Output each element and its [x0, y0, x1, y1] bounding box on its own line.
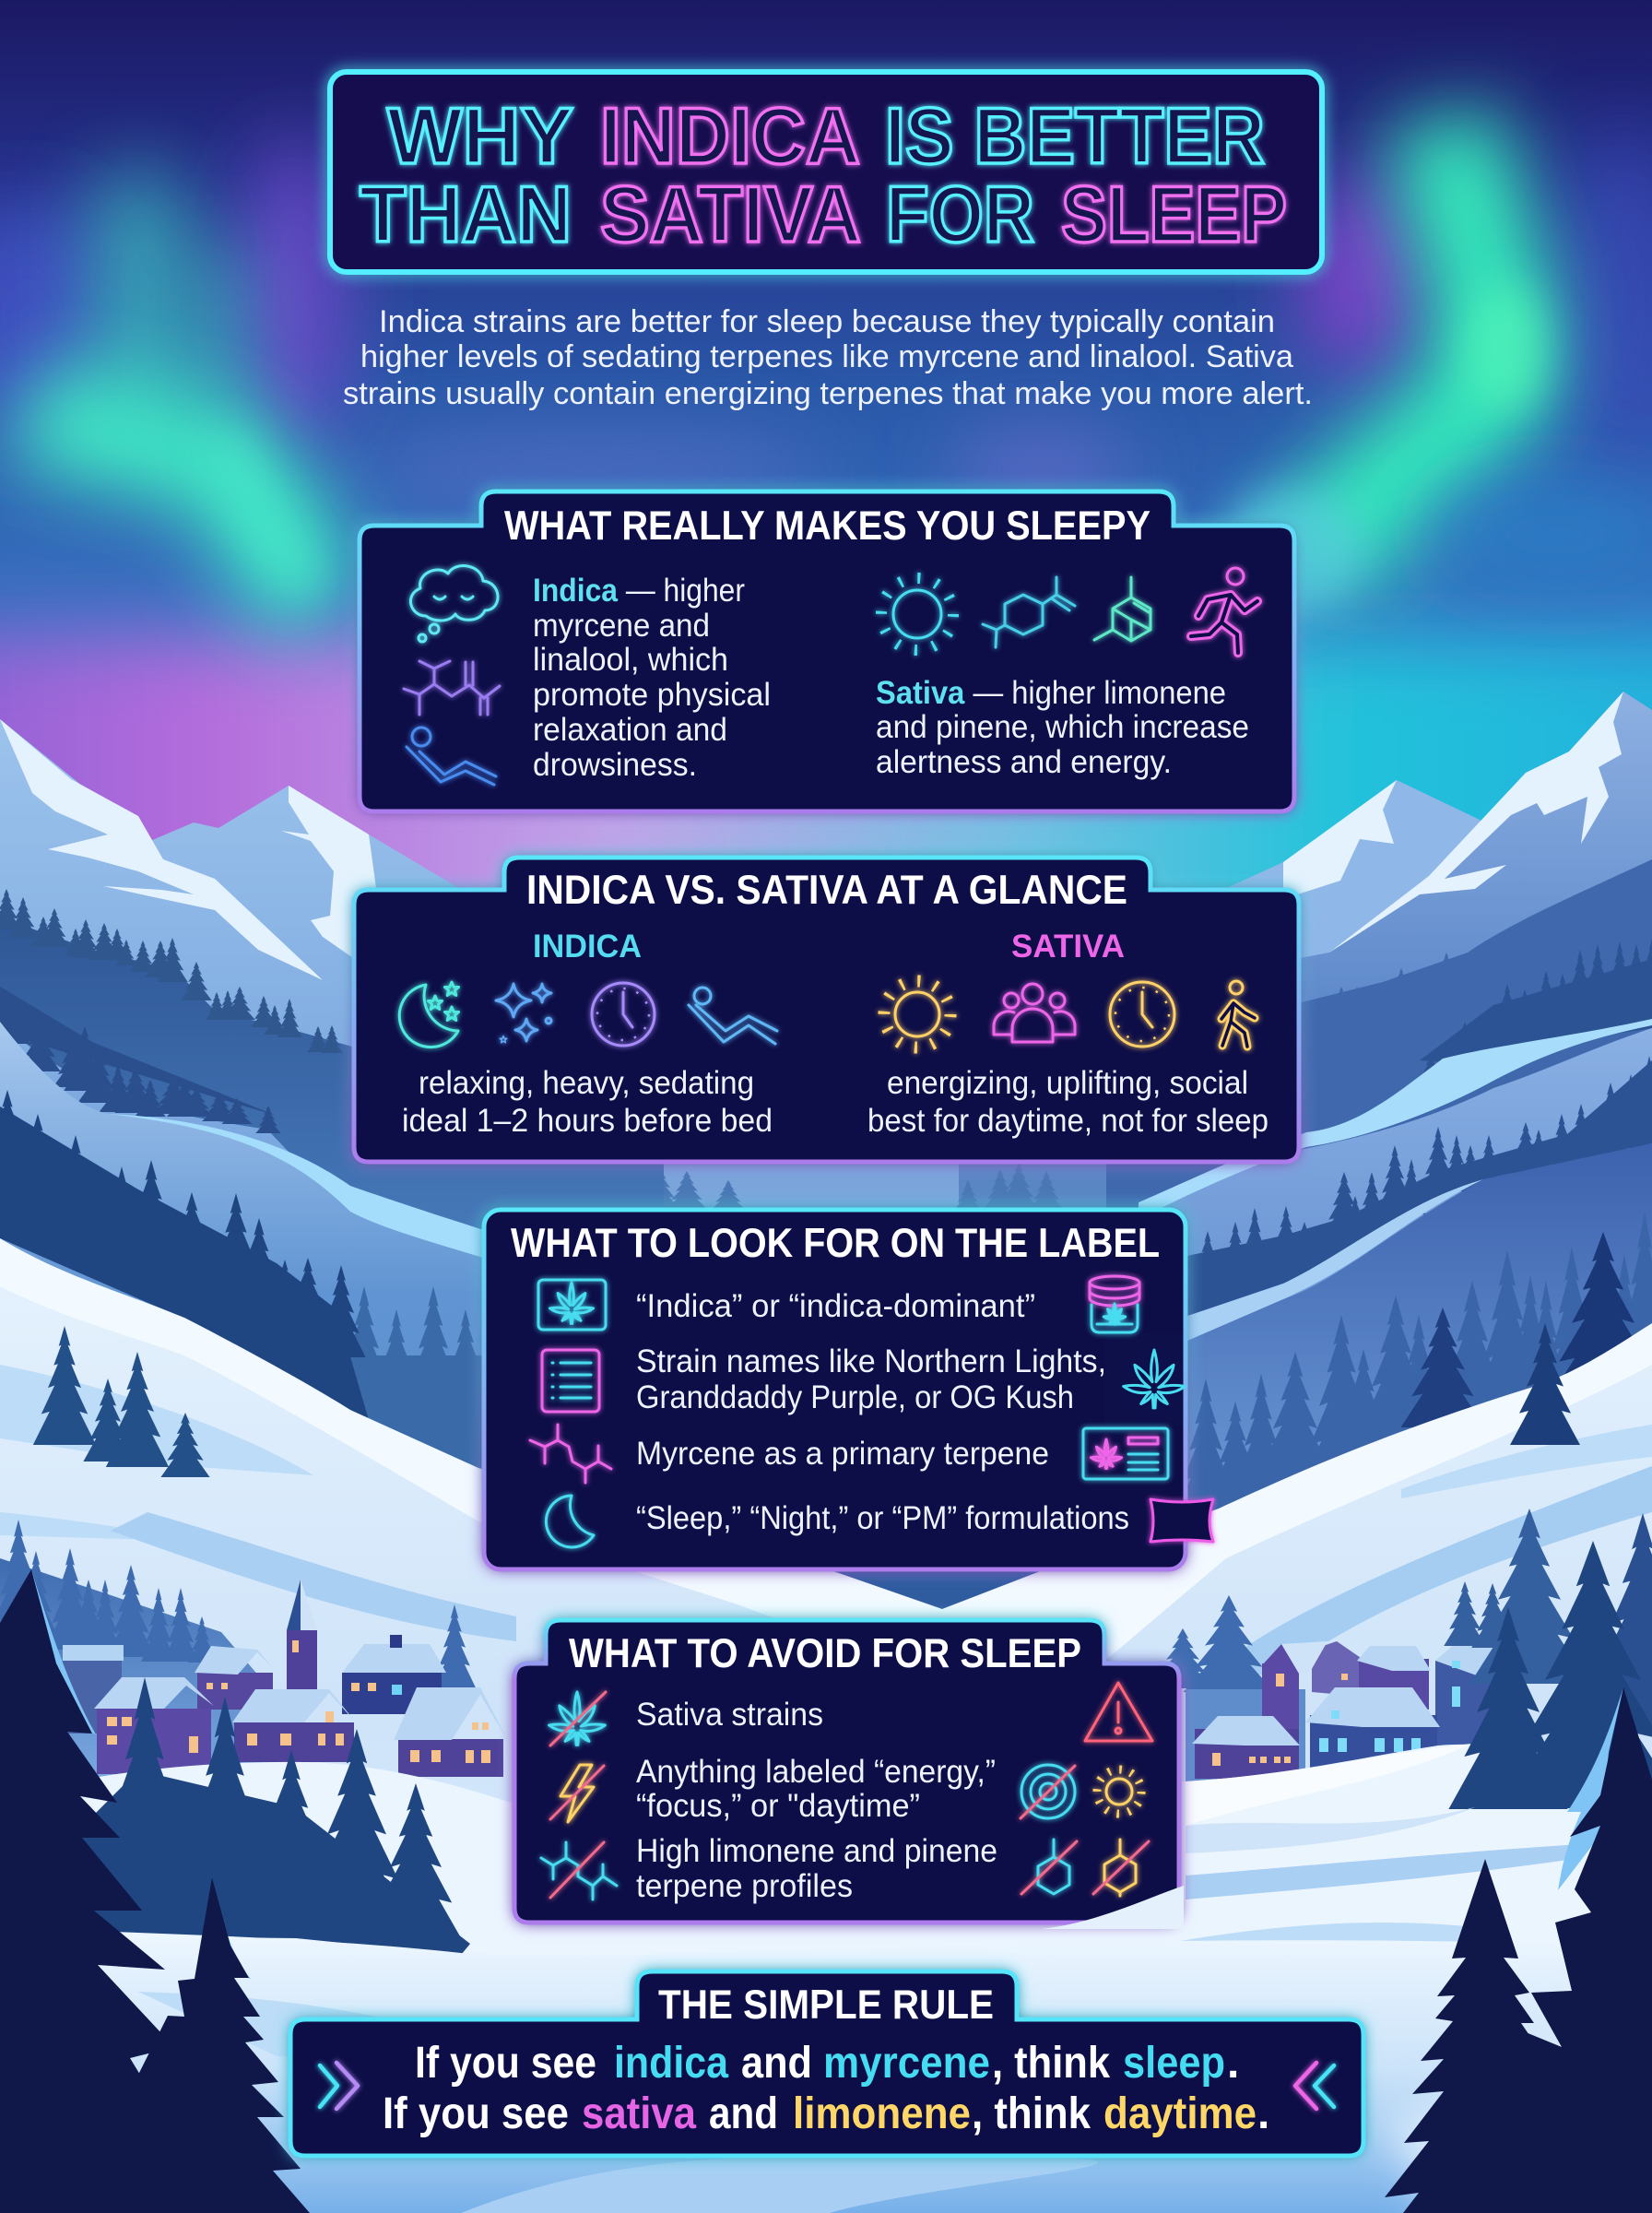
row text — [636, 1343, 1106, 1415]
panel shape — [514, 1620, 1179, 1923]
panel: what to look for on the label — [484, 1210, 1213, 1569]
sativa text: alertness and energy. — [876, 744, 1172, 780]
icon: sleeping cloud — [410, 566, 498, 642]
icon: moon and stars — [399, 982, 459, 1047]
heading: THE SIMPLE RULE — [658, 1982, 994, 2028]
indica text: linalool, which — [533, 642, 728, 678]
panel: what to avoid for sleep — [514, 1620, 1184, 1929]
icon: warning triangle — [1085, 1683, 1152, 1741]
title text line 1 — [387, 92, 1265, 181]
sativa description: energizing, uplifting, social — [887, 1065, 1248, 1101]
row 3: terpene profiles — [541, 1833, 1149, 1904]
icon: group of people — [994, 984, 1075, 1042]
icon: runner — [1191, 568, 1257, 653]
foreground navy trees left — [0, 1569, 310, 2213]
row text: “Sleep,” “Night,” or “PM” formulations — [636, 1500, 1129, 1536]
icon: limonene molecule — [983, 577, 1075, 647]
night sky — [0, 0, 1652, 922]
sativa description: best for daytime, not for sleep — [867, 1103, 1268, 1139]
icon: purple clock — [592, 983, 655, 1046]
right mid tree line — [1152, 1056, 1652, 1328]
intro paragraph: higher levels of sedating terpenes like myrcene and linalool. Sativa — [360, 339, 1293, 374]
indica text: promote physical — [533, 677, 771, 713]
icon: myrcene molecule — [404, 661, 500, 715]
title text line 2: SLEEP — [1061, 171, 1287, 259]
title text line 1: IS BETTER — [885, 92, 1265, 181]
row text — [636, 1833, 997, 1904]
icon: crossed leaf — [549, 1692, 606, 1746]
village snow foreground — [0, 1745, 1652, 2213]
rule line 2: daytime — [1103, 2089, 1257, 2138]
icon: pinene molecule — [1094, 577, 1150, 641]
lower snow field — [0, 1927, 1652, 2213]
rule line 1: . — [1227, 2039, 1239, 2088]
row 3: myrcene — [530, 1425, 1168, 1483]
far forest behind left village — [0, 1520, 476, 1780]
panel shape — [290, 1971, 1363, 2156]
row text: Strain names like Northern Lights, — [636, 1343, 1106, 1379]
icon: crossed target — [1021, 1765, 1075, 1818]
icon: moon — [546, 1496, 594, 1547]
rule line 2: , think — [972, 2089, 1091, 2138]
left village — [63, 1580, 507, 1777]
indica text: relaxation and — [533, 712, 727, 748]
right large tree group — [1174, 1212, 1652, 1521]
heading: WHAT TO AVOID FOR SLEEP — [569, 1631, 1081, 1676]
row text: “Indica” or “indica-dominant” — [636, 1288, 1035, 1324]
row 2: strain names — [542, 1343, 1185, 1415]
left hazy trees near panel — [332, 1286, 498, 1494]
title text line 2: SATIVA — [600, 171, 861, 259]
title frame — [330, 72, 1322, 272]
icon: pillow — [1150, 1499, 1213, 1542]
foreground navy trees right — [1385, 1687, 1652, 2213]
indica description — [402, 1065, 773, 1139]
rule line 1: and — [741, 2039, 812, 2088]
icon: reclining person — [689, 988, 777, 1044]
indica description: ideal 1–2 hours before bed — [402, 1103, 773, 1139]
row text: “focus,” or "daytime” — [636, 1788, 920, 1824]
rule line 1: indica — [614, 2039, 728, 2088]
left dark blue forest — [55, 1677, 470, 1955]
icon: walking person — [1221, 981, 1255, 1047]
left dark tree band — [0, 1090, 369, 1420]
snow hills — [0, 1238, 1652, 2213]
sativa text: Sativa — higher limonene — [876, 675, 1226, 711]
icon: crossed bolt — [550, 1765, 604, 1822]
aurora lights — [0, 120, 1652, 1005]
rule line 2 — [383, 2089, 1269, 2138]
faint right tree line — [1304, 953, 1457, 1028]
row text: Sativa strains — [636, 1697, 823, 1733]
right snow ridge — [1139, 1019, 1652, 1219]
right mid slope — [1106, 1028, 1652, 1402]
row 4: sleep formulations — [546, 1496, 1213, 1547]
title text line 2: THAN — [360, 171, 572, 259]
row text — [636, 1754, 996, 1824]
indica column label: INDICA — [533, 929, 642, 964]
row text: Granddaddy Purple, or OG Kush — [636, 1379, 1074, 1415]
rule line 2: If you see — [383, 2089, 569, 2138]
rule line 1: , think — [992, 2039, 1110, 2088]
icon: right chevrons — [1295, 2063, 1334, 2109]
row text: Myrcene as a primary terpene — [636, 1436, 1049, 1472]
icon: sun — [881, 578, 953, 650]
heading: WHAT TO LOOK FOR ON THE LABEL — [511, 1221, 1160, 1266]
sativa description — [867, 1065, 1268, 1139]
rule line 1 — [415, 2039, 1239, 2088]
title panel — [330, 72, 1322, 272]
icon: small sun — [1097, 1769, 1141, 1814]
rule line 1: If you see — [415, 2039, 596, 2088]
rule line 2: limonene — [793, 2089, 971, 2138]
row text: Anything labeled “energy,” — [636, 1754, 996, 1790]
right mountains — [1106, 692, 1652, 1217]
sativa text: and pinene, which increase — [876, 709, 1249, 745]
indica text: Indica — higher — [533, 573, 745, 609]
row 1: indica label — [538, 1276, 1139, 1332]
intro paragraph: strains usually contain energizing terpenes that make you more alert. — [343, 376, 1313, 411]
icon: sparkles — [496, 984, 551, 1043]
title text line 1: INDICA — [600, 92, 860, 181]
icon: jar — [1090, 1276, 1139, 1332]
icon: cannabis leaf — [1124, 1350, 1185, 1408]
row text: High limonene and pinene — [636, 1833, 997, 1869]
title text line 2 — [360, 171, 1287, 259]
panel shape — [354, 858, 1299, 1162]
panel: what really makes you sleepy — [360, 491, 1294, 811]
panel: indica vs sativa at a glance — [354, 858, 1299, 1162]
sativa text — [876, 675, 1249, 780]
intro paragraph — [343, 304, 1313, 411]
icon: list — [542, 1350, 599, 1412]
center base behind panels — [332, 922, 1328, 1660]
left snow ridge — [108, 1114, 516, 1268]
icon: left chevrons — [320, 2063, 358, 2109]
left mountains — [0, 719, 516, 1217]
icon: leaf label — [538, 1280, 606, 1330]
intro paragraph: Indica strains are better for sleep because they typically contain — [379, 304, 1275, 339]
rule line 2: . — [1257, 2089, 1269, 2138]
panel: the simple rule — [290, 1971, 1363, 2156]
snow overlapping corner — [1042, 1886, 1184, 1929]
divider — [825, 569, 829, 787]
lower left trees — [33, 1326, 210, 1477]
indica text: myrcene and — [533, 608, 710, 644]
icon: crossed molecule — [541, 1842, 617, 1899]
sativa column label: SATIVA — [1011, 929, 1125, 964]
divider — [825, 931, 829, 1139]
indica text — [533, 573, 771, 783]
rule line 2: and — [709, 2089, 778, 2138]
indica text: drowsiness. — [533, 747, 697, 783]
icon: label card — [1083, 1428, 1168, 1479]
panel shape — [484, 1210, 1186, 1569]
icon: reclining person — [407, 728, 496, 785]
title text line 1: WHY — [387, 92, 573, 181]
upper right tree line — [1417, 939, 1652, 1090]
row text: terpene profiles — [636, 1868, 853, 1904]
rule line 2: sativa — [582, 2089, 696, 2138]
heading: INDICA VS. SATIVA AT A GLANCE — [526, 868, 1127, 913]
left dark forest band — [0, 889, 664, 1236]
snow drift stripes — [1180, 1744, 1581, 1959]
icon: yellow clock — [1110, 982, 1174, 1047]
panel shape — [360, 491, 1294, 811]
indica description: relaxing, heavy, sedating — [419, 1065, 754, 1101]
right middle trees — [1444, 1509, 1652, 1809]
row 2: energy labels — [550, 1754, 1141, 1824]
right lower hill with stripe — [1106, 1143, 1652, 1512]
icon: yellow sun — [884, 981, 950, 1047]
center tree tips — [615, 1164, 1064, 1210]
right village with trees — [1151, 1595, 1526, 1781]
lone tree right — [1510, 1323, 1580, 1445]
icon: molecule — [530, 1425, 611, 1483]
heading: WHAT REALLY MAKES YOU SLEEPY — [504, 503, 1150, 549]
icon: crossed hexagon — [1021, 1840, 1077, 1894]
row 1: sativa strains — [549, 1683, 1152, 1746]
rule line 1: myrcene — [823, 2039, 990, 2088]
title text line 2: FOR — [886, 171, 1034, 259]
left mid slope — [0, 1022, 664, 1568]
icon: crossed yellow hexagon — [1093, 1840, 1149, 1896]
rule line 1: sleep — [1123, 2039, 1225, 2088]
